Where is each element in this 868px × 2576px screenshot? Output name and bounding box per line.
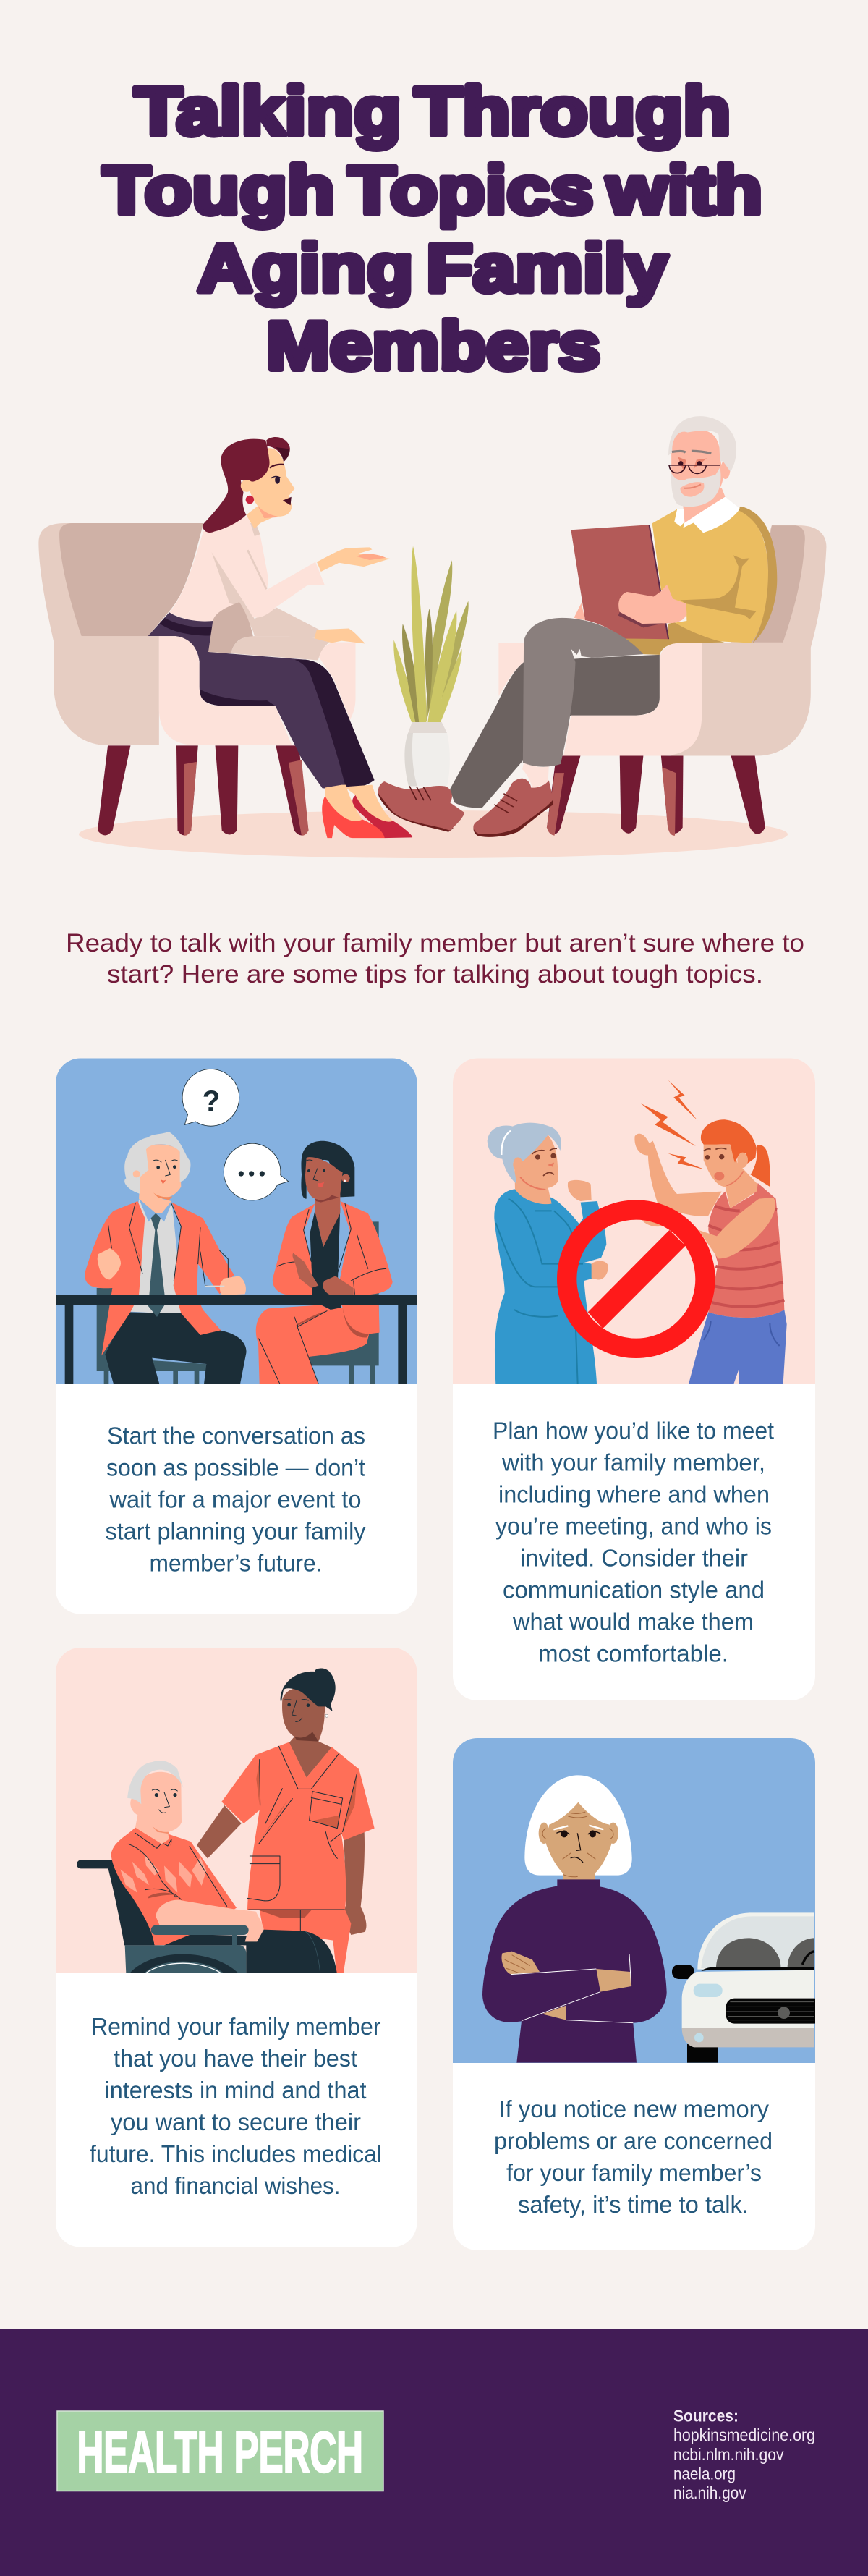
- title: Members: [266, 308, 600, 384]
- card background: [453, 1058, 815, 1700]
- older woman: [482, 1775, 667, 2063]
- man in right armchair with folder: [378, 416, 826, 837]
- card text: safety, it’s time to talk.: [518, 2191, 749, 2218]
- intro text: [66, 929, 804, 988]
- card text: future. This includes medical: [90, 2140, 382, 2167]
- title: Talking Through: [135, 73, 731, 149]
- card text: invited. Consider their: [520, 1544, 748, 1572]
- card text: with your family member,: [501, 1449, 765, 1476]
- card text: member’s future.: [149, 1550, 323, 1577]
- card text: start planning your family: [106, 1518, 366, 1545]
- older man: [111, 1761, 337, 1974]
- card background: [56, 1648, 417, 2247]
- card background: [453, 1738, 815, 2250]
- title: Aging Family: [197, 230, 668, 305]
- card text: interests in mind and that: [104, 2077, 366, 2103]
- wheelchair back: [77, 1860, 155, 1945]
- sources list: hopkinsmedicine.org: [673, 2425, 815, 2444]
- card text: If you notice new memory: [499, 2096, 769, 2122]
- card text: what would make them: [512, 1608, 754, 1635]
- intro text: Ready to talk with your family member but aren’t sure where to: [66, 929, 804, 957]
- sources list: Sources:: [673, 2407, 739, 2425]
- card text: communication style and: [503, 1576, 765, 1603]
- younger woman: [634, 1119, 787, 1384]
- card text: you want to secure their: [111, 2109, 361, 2135]
- card text: [494, 2096, 773, 2218]
- panel: remind your family member: [56, 1648, 417, 2247]
- card text: most comfortable.: [538, 1640, 728, 1667]
- sources list: [673, 2407, 815, 2502]
- card text: for your family member’s: [506, 2159, 762, 2186]
- card text: that you have their best: [114, 2045, 357, 2072]
- speech bubble: question mark: [182, 1069, 239, 1126]
- card text: Remind your family member: [91, 2013, 380, 2040]
- hero illustration: two people talking in armchairs: [38, 416, 826, 858]
- prohibition sign: [567, 1210, 705, 1348]
- logo: Health Perch: [57, 2411, 383, 2491]
- card text: [493, 1417, 774, 1667]
- panel: plan the meeting: [453, 1058, 815, 1700]
- wheelchair frame: [125, 1925, 249, 1974]
- sources list: nia.nih.gov: [673, 2483, 746, 2502]
- card text: including where and when: [498, 1480, 770, 1508]
- footer band: [0, 2329, 868, 2576]
- card text: and financial wishes.: [130, 2172, 340, 2199]
- nurse: [197, 1668, 375, 1974]
- card text: [90, 2013, 382, 2199]
- sources list: naela.org: [673, 2465, 736, 2483]
- speech bubble: question mark: ?: [203, 1085, 220, 1118]
- card text: you’re meeting, and who is: [495, 1512, 772, 1540]
- card text: soon as possible — don’t: [106, 1454, 365, 1481]
- illustration: argument with a prohibition sign: [453, 1058, 815, 1384]
- title: Tough Topics with: [103, 152, 762, 228]
- woman in left armchair: [38, 437, 412, 838]
- card text: Plan how you’d like to meet: [493, 1417, 774, 1444]
- man: [85, 1132, 246, 1384]
- card text: problems or are concerned: [494, 2127, 773, 2154]
- panel: start the conversation: [56, 1058, 417, 1614]
- car: [672, 1912, 822, 2063]
- card background: [56, 1058, 417, 1614]
- logo: Health Perch: HEALTH PERCH: [77, 2420, 363, 2484]
- illustration: two colleagues talking at a table: [56, 1058, 417, 1384]
- panel: memory or safety concerns: [453, 1738, 822, 2250]
- title: [103, 73, 762, 384]
- card text: wait for a major event to: [109, 1486, 362, 1513]
- lightning bolts: [641, 1080, 705, 1169]
- sources list: ncbi.nlm.nih.gov: [673, 2445, 784, 2464]
- card text: Start the conversation as: [107, 1423, 365, 1449]
- illustration: worried older woman beside a car: [453, 1738, 822, 2063]
- card text: [106, 1423, 366, 1577]
- speech bubble: ellipsis: [224, 1143, 289, 1200]
- floor shadow: [79, 810, 788, 858]
- woman: [256, 1141, 393, 1384]
- older woman: [488, 1123, 608, 1384]
- table: [56, 1295, 417, 1384]
- illustration: nurse with man in a wheelchair: [56, 1648, 417, 1974]
- potted plant: [393, 546, 469, 787]
- intro text: start? Here are some tips for talking about tough topics.: [107, 960, 763, 988]
